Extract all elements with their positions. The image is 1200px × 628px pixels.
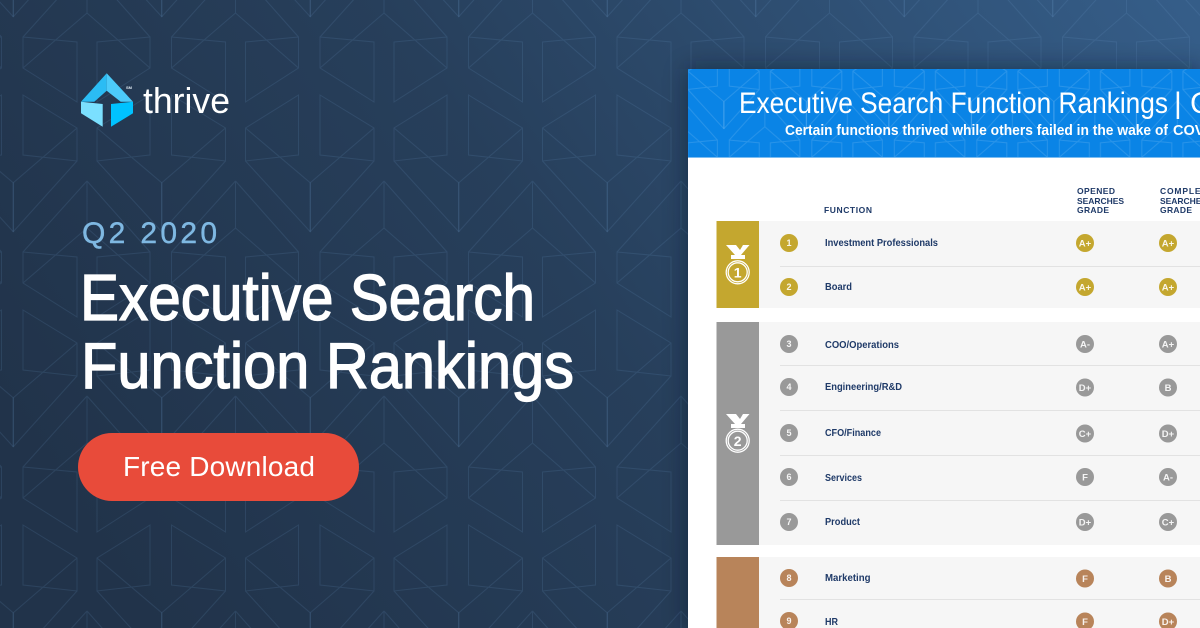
row: Marketing: B (1165, 574, 1172, 585)
row: Product (780, 513, 1177, 531)
title: Function Rankings (81, 329, 574, 402)
row: Marketing (780, 569, 1177, 588)
icon: gold medal: 1 (734, 264, 742, 280)
row: HR: 9 (786, 616, 792, 626)
table column headers (824, 186, 1200, 215)
icon: gold medal (726, 245, 750, 284)
row: Marketing: 8 (786, 573, 792, 583)
table column headers: SEARCHES (1077, 196, 1124, 206)
row: Services: Services (825, 473, 862, 484)
row: Marketing: Marketing (825, 573, 870, 584)
row: Investment Professionals (780, 234, 1177, 252)
logo: thrive (81, 73, 230, 127)
silver tier (716, 322, 1200, 545)
bronze tier (716, 557, 1200, 628)
icon: thrive house arrow (81, 73, 133, 127)
row: Investment Professionals: Investment Professionals (825, 238, 938, 249)
row: Board: Board (825, 282, 852, 293)
icon: silver medal (726, 414, 750, 452)
quarter label: Q2 2020 (82, 217, 217, 250)
logo: thrive: thrive (143, 80, 230, 121)
row: HR: F (1082, 617, 1088, 628)
row: Engineering/R&D: B (1165, 383, 1172, 394)
row: Investment Professionals: A+ (1079, 238, 1092, 249)
table column headers: GRADE (1077, 205, 1109, 215)
row: CFO/Finance: 5 (786, 428, 792, 438)
row: CFO/Finance: D+ (1162, 429, 1175, 440)
table column headers: OPENED (1077, 186, 1115, 196)
row: Services: 6 (786, 472, 792, 482)
row: HR: D+ (1162, 617, 1175, 628)
row: COO/Operations: COO/Operations (825, 340, 899, 351)
row: Product: C+ (1162, 517, 1175, 528)
row: Investment Professionals: A+ (1162, 238, 1175, 249)
row: Board: A+ (1162, 282, 1175, 293)
row: CFO/Finance: C+ (1079, 429, 1092, 440)
title: Executive Search (80, 261, 535, 334)
row: HR: HR (825, 617, 839, 628)
gold tier (716, 221, 1200, 308)
row: Marketing: F (1082, 574, 1088, 585)
row: Board: 2 (786, 282, 792, 292)
table column headers: FUNCTION (824, 205, 872, 215)
logo: thrive: SM (126, 85, 133, 90)
icon: silver medal: 2 (734, 433, 742, 449)
row: Engineering/R&D: Engineering/R&D (825, 382, 902, 393)
row: Investment Professionals: 1 (786, 238, 792, 248)
row: Services: F (1082, 472, 1088, 483)
row: COO/Operations: A+ (1162, 339, 1175, 350)
title (80, 261, 574, 402)
row: Product: 7 (786, 517, 792, 527)
button: free download: Free Download (123, 451, 315, 482)
row: Engineering/R&D: 4 (786, 382, 792, 392)
row: Product: Product (825, 517, 861, 528)
row: COO/Operations (780, 335, 1177, 353)
row: COO/Operations: A- (1080, 339, 1090, 350)
panel header (688, 69, 1200, 158)
panel subheading: Certain functions thrived while others failed in the wake of (785, 123, 1168, 139)
row: Board (780, 278, 1177, 296)
row: Services (780, 468, 1177, 486)
row: Services: A- (1163, 472, 1173, 483)
row: CFO/Finance (780, 424, 1177, 442)
panel: rankings report (688, 69, 1200, 628)
row: Board: A+ (1079, 282, 1092, 293)
table column headers: GRADE (1160, 205, 1192, 215)
panel shadow (688, 69, 1200, 628)
row: COO/Operations: 3 (786, 339, 792, 349)
row: Product: D+ (1079, 517, 1092, 528)
button: free download (78, 433, 359, 501)
row: Engineering/R&D: D+ (1079, 383, 1092, 394)
row: CFO/Finance: CFO/Finance (825, 428, 881, 439)
row: Engineering/R&D (780, 378, 1177, 396)
row: HR (780, 612, 1177, 628)
